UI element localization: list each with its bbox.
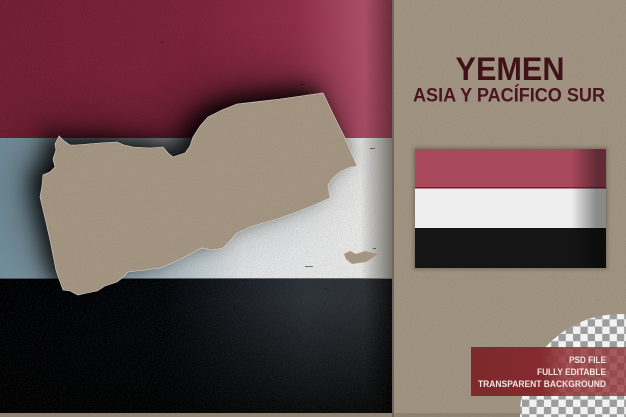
- map of Yemen: [35, 90, 360, 298]
- badge text: line 3: TRANSPARENT BACKGROUND: [478, 379, 606, 389]
- red badge: [471, 347, 626, 396]
- flag speckles: [160, 42, 376, 290]
- subtitle: ASIA Y PACÍFICO SUR: [413, 84, 605, 106]
- background flag: [0, 0, 392, 417]
- map: Socotra island: [344, 251, 378, 264]
- badge text: line 2: FULLY EDITABLE: [537, 367, 606, 377]
- title: YEMEN: YEMEN: [456, 51, 564, 87]
- badge text: line 1: PSD FILE: [569, 355, 606, 365]
- flag band: black: [0, 278, 392, 417]
- small flag: [413, 147, 608, 270]
- flag band: white: [0, 138, 392, 278]
- transparency checkerboard: [520, 314, 626, 417]
- flag band: red: [0, 0, 392, 138]
